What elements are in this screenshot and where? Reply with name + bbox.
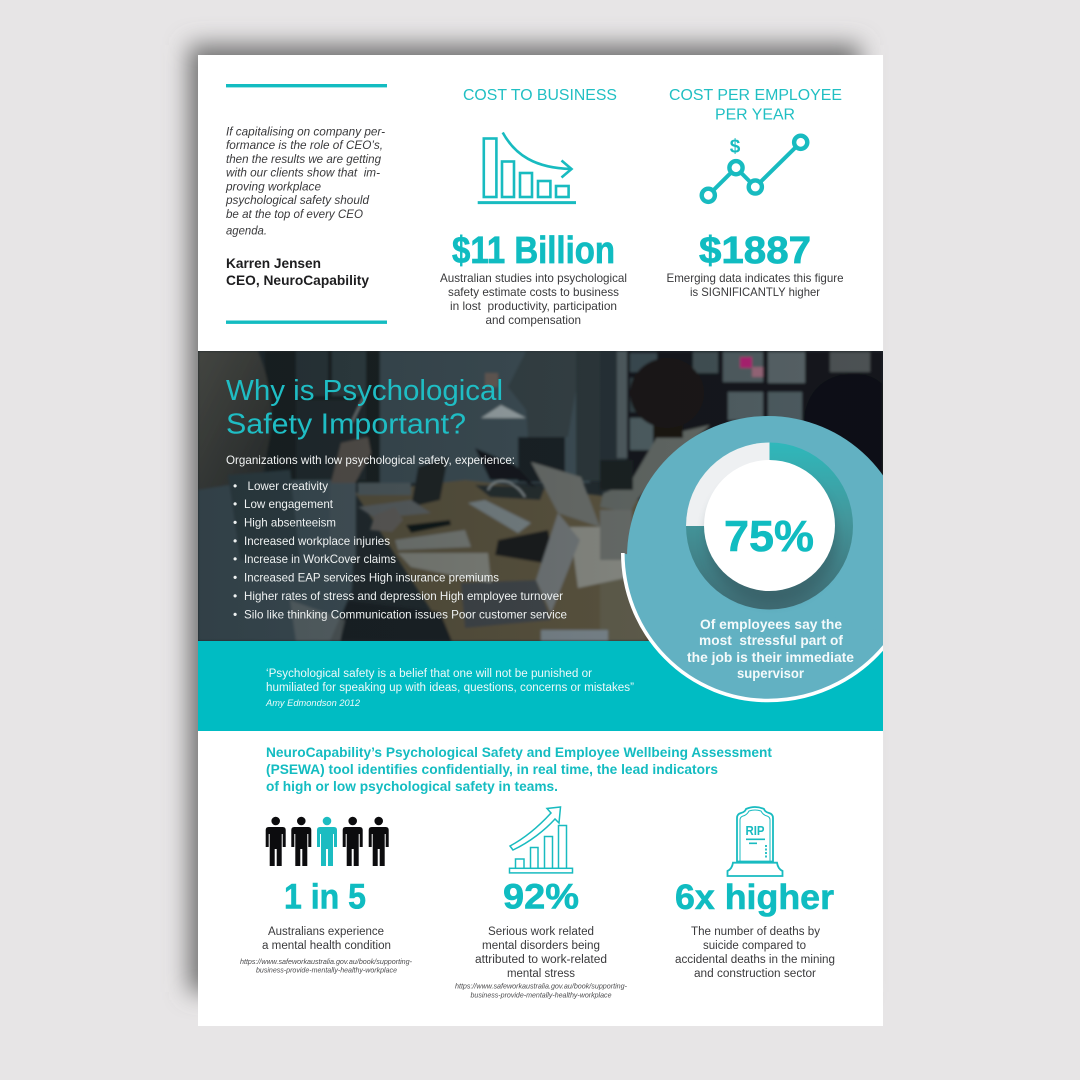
icon: rising line with dollar — [702, 136, 807, 202]
bullet list: • — [233, 516, 237, 530]
heading: COST PER EMPLOYEE — [669, 87, 842, 104]
photo tint — [198, 351, 883, 641]
description: Australians experience — [268, 926, 384, 938]
big number: $1887 — [699, 230, 811, 272]
quote text: proving workplace — [225, 180, 321, 194]
bullet list: Increased workplace injuries — [244, 534, 390, 548]
back wall — [380, 351, 590, 483]
panel: teal quote band — [198, 641, 883, 731]
bullet list: Lower creativity — [248, 479, 328, 493]
heading: Why is Psychological — [226, 375, 503, 407]
description: is SIGNIFICANTLY higher — [690, 285, 820, 299]
description: attributed to work-related — [475, 954, 607, 966]
bullet list: • — [233, 497, 237, 511]
description: a mental health condition — [262, 940, 391, 952]
quote text: If capitalising on company per- — [226, 124, 385, 138]
percentage: 75% — [724, 512, 814, 561]
attribution: CEO, NeuroCapability — [226, 272, 369, 288]
description — [475, 926, 607, 980]
callout text: supervisor — [737, 665, 805, 681]
bullet list: • — [233, 552, 237, 566]
source: https://www.safeworkaustralia.gov.au/book/supporting- — [240, 957, 413, 966]
description: in lost productivity, participation — [450, 299, 617, 313]
panel: why psychological safety text — [226, 375, 567, 622]
description: The number of deaths by — [691, 926, 820, 938]
description: Australian studies into psychological — [440, 271, 627, 285]
icon: gravestone — [728, 807, 782, 876]
icon: gravestone: RIP — [746, 823, 765, 838]
big number: 92% — [503, 878, 579, 916]
callout text: most stressful part of — [699, 632, 843, 648]
panel: definition quote: ‘Psychological safety is a belief that one will not be punished or — [266, 668, 592, 680]
bullet list: • — [233, 479, 237, 493]
curly-haired person — [600, 425, 710, 513]
blond person foreground — [198, 351, 272, 500]
bullet list: High absenteeism — [244, 516, 336, 530]
panel: CEO quote — [225, 84, 387, 324]
heading: PER YEAR — [715, 106, 795, 124]
bullet list: • — [233, 570, 237, 584]
page shadow — [189, 45, 860, 992]
quote text: agenda. — [226, 224, 267, 238]
bullet list: Low engagement — [244, 497, 334, 511]
wooden table — [355, 480, 660, 641]
description: and compensation — [486, 313, 581, 327]
heading: PSEWA tool intro: NeuroCapability’s Psychological Safety and Employee Wellbeing Assessment — [266, 744, 772, 760]
description: and construction sector — [694, 968, 816, 980]
source — [455, 982, 628, 1000]
heading: Safety Important? — [226, 408, 466, 440]
bullet list: Increased EAP services High insurance premiums — [244, 570, 499, 584]
page sheet — [198, 55, 883, 1026]
top rule — [226, 84, 387, 87]
icon: rising line with dollar: $ — [730, 136, 741, 158]
white arc — [623, 553, 893, 700]
description: Serious work related — [488, 926, 594, 938]
source: business-provide-mentally-healthy-workplace — [470, 990, 612, 1000]
dark-haired person right — [862, 375, 882, 473]
callout text — [687, 616, 854, 681]
bullet list: • — [233, 534, 237, 548]
panel: definition quote — [265, 668, 634, 708]
attribution — [226, 255, 369, 288]
callout text: the job is their immediate — [687, 649, 854, 665]
panel: photo background of a meeting — [198, 351, 883, 641]
big number: $11 Billion — [452, 230, 615, 272]
description — [262, 926, 391, 952]
description: mental stress — [507, 968, 575, 980]
description: suicide compared to — [703, 940, 806, 952]
panel: definition quote: humiliated for speaking up with ideas, questions, concerns or mistakes” — [266, 682, 634, 694]
bullet list: Silo like thinking Communication issues Poor customer service — [244, 608, 567, 622]
description: accidental deaths in the mining — [675, 954, 835, 966]
quote text: then the results we are getting — [226, 152, 381, 166]
attribution: Karren Jensen — [226, 255, 321, 271]
description: Emerging data indicates this figure — [666, 271, 844, 285]
heading — [226, 375, 503, 440]
heading: PSEWA tool intro: of high or low psychological safety in teams. — [266, 778, 558, 794]
bullet list: Increase in WorkCover claims — [244, 552, 396, 566]
heading: PSEWA tool intro: (PSEWA) tool identifies confidentially, in real time, the lead indicators — [266, 761, 718, 777]
windows upper right — [627, 351, 883, 486]
panel: 75% callout circle — [623, 416, 909, 700]
panel: cost per employee — [666, 87, 844, 299]
bullet list: Higher rates of stress and depression High employee turnover — [244, 589, 563, 603]
icon: five people — [266, 817, 389, 866]
description: safety estimate costs to business — [448, 285, 619, 299]
laptops, folders and papers — [358, 483, 411, 495]
bullet list: • — [233, 608, 237, 622]
quote text: be at the top of every CEO — [226, 207, 363, 221]
big number: 6x higher — [675, 878, 834, 917]
bullet list: • — [233, 589, 237, 603]
heading: COST TO BUSINESS — [463, 87, 617, 104]
description: mental disorders being — [482, 940, 600, 952]
standing man — [508, 351, 576, 437]
heading — [669, 87, 842, 124]
quote text: with our clients show that im- — [226, 166, 380, 180]
back window — [265, 351, 380, 486]
bottom rule — [226, 320, 387, 324]
callout text: Of employees say the — [700, 616, 842, 632]
panel: cost to business — [440, 87, 627, 327]
source — [240, 957, 413, 974]
heading: PSEWA tool intro — [266, 744, 772, 794]
source: https://www.safeworkaustralia.gov.au/book/supporting- — [455, 982, 628, 990]
description — [440, 271, 627, 327]
circle background — [627, 416, 883, 632]
big number: 1 in 5 — [284, 878, 366, 916]
quote text: psychological safety should — [225, 193, 369, 207]
panel: 1 in 5 — [240, 817, 413, 974]
quote text: formance is the role of CEO’s, — [226, 138, 383, 152]
source: business-provide-mentally-healthy-workplace — [256, 966, 397, 974]
description — [666, 271, 844, 299]
donut chart — [686, 442, 853, 610]
panel: definition quote: Amy Edmondson 2012 — [265, 698, 360, 708]
quote text — [225, 124, 385, 238]
intro line: Organizations with low psychological safety, experience: — [226, 453, 515, 467]
panel: 6x higher — [675, 807, 835, 980]
bullet list — [233, 479, 567, 622]
panel: 92% — [455, 807, 628, 1000]
icon: rising bars with arrow — [510, 807, 572, 873]
icon: falling bar chart — [478, 132, 576, 203]
description — [675, 926, 835, 980]
